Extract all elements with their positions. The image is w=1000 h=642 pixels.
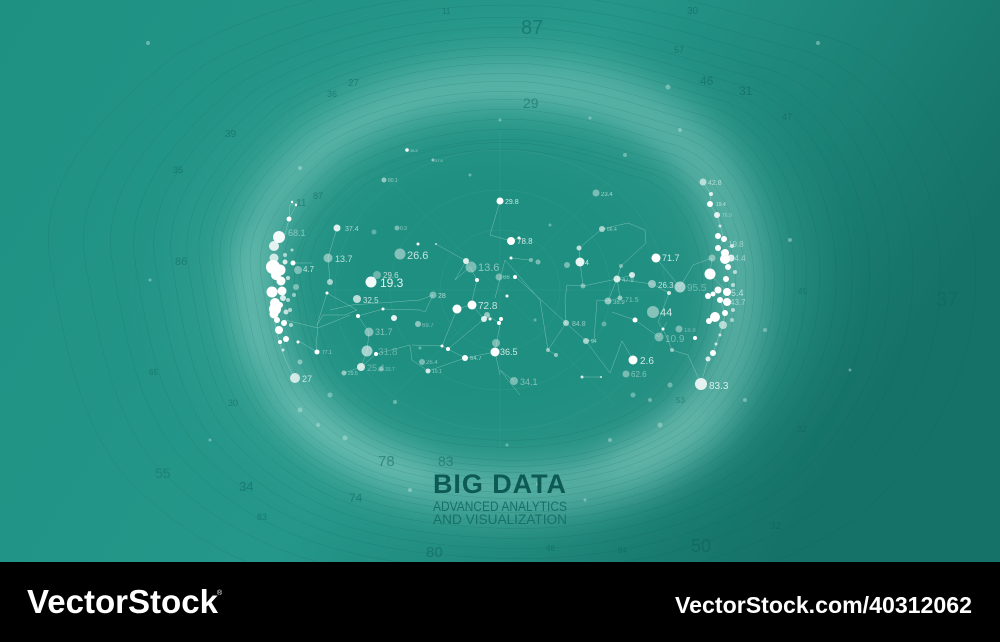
- background numbers: 36: [327, 89, 337, 99]
- footer logo: VectorStock: [27, 583, 219, 620]
- data value labels: 62.6: [631, 370, 647, 379]
- background numbers: 11: [296, 198, 307, 209]
- background numbers: 78: [378, 453, 395, 470]
- data value labels: 31.8: [378, 347, 398, 358]
- data value labels: 94: [591, 339, 597, 345]
- data value labels: 31.7: [375, 327, 393, 337]
- data value labels: 95.5: [687, 283, 707, 294]
- background numbers: 55: [155, 465, 171, 481]
- background numbers: 30: [228, 398, 238, 408]
- right data cluster: [700, 178, 737, 362]
- data value labels: 33.7: [385, 367, 395, 373]
- background numbers: 74: [349, 491, 363, 505]
- data value labels: 84.8: [572, 321, 586, 328]
- data value labels: 19.8: [728, 240, 744, 249]
- data value labels: 38.5: [410, 148, 419, 153]
- data value labels: 19.4: [716, 202, 726, 208]
- background numbers: 87: [521, 17, 543, 39]
- data value labels: 68.1: [288, 228, 306, 238]
- subtitle: advanced analytics and visualization: ADVANCED ANALYTICS: [433, 499, 567, 514]
- background numbers: 37: [936, 289, 958, 311]
- background numbers: 80: [426, 544, 443, 561]
- left and centre data nodes: [290, 148, 540, 385]
- data value labels: 4: [585, 260, 589, 267]
- background numbers: 11: [442, 7, 451, 16]
- data value labels: 19.3: [380, 276, 404, 290]
- data value labels: 69.7: [422, 323, 434, 329]
- data value labels: 25.4: [367, 363, 385, 373]
- glowing ring: [175, 35, 815, 535]
- background numbers: 32: [770, 521, 782, 532]
- right data nodes: [546, 190, 707, 390]
- data value labels: 4.7: [303, 265, 315, 274]
- title: big data: BIG DATA: [433, 469, 566, 499]
- data value labels: 13.7: [335, 254, 353, 264]
- background numbers: 83: [438, 453, 454, 469]
- data value labels: 18.8: [684, 328, 696, 334]
- polar grid in the centre: [330, 130, 670, 450]
- background numbers: 35: [173, 165, 183, 175]
- data value labels: 29.6: [383, 271, 399, 280]
- footer image id: VectorStock.com/40312062: [675, 592, 972, 618]
- background numbers: 87: [313, 191, 323, 201]
- data value labels: 36.5: [500, 347, 518, 357]
- data value labels: 26.3: [658, 281, 674, 290]
- subtitle: advanced analytics and visualization: AND VISUALIZATION: [433, 512, 567, 527]
- background numbers: 83: [257, 512, 267, 522]
- background numbers: 32: [797, 424, 807, 434]
- background numbers: 29: [523, 95, 539, 111]
- data value labels: 42.8: [708, 180, 722, 187]
- data value labels: 38.9: [613, 300, 625, 306]
- background numbers: 86: [175, 256, 187, 268]
- data value labels: 26.6: [407, 250, 428, 262]
- data value labels: 64.7: [470, 356, 482, 362]
- subtitle: advanced analytics and visualization: [433, 499, 567, 527]
- data value labels: 32.5: [363, 296, 379, 305]
- background numbers: 39: [225, 129, 237, 140]
- data value labels: [288, 148, 746, 392]
- background numbers: 65: [149, 368, 158, 377]
- data value labels: 77.1: [322, 350, 332, 356]
- data value labels: 0.3: [400, 226, 407, 232]
- left data cluster: [266, 201, 302, 364]
- scattered dust particles: [146, 41, 852, 502]
- data value labels: 29.8: [505, 199, 519, 206]
- data value labels: 24.4: [730, 254, 746, 263]
- background numbers: 31: [739, 84, 753, 98]
- data value labels: 71.5: [625, 297, 639, 304]
- data value labels: 28: [438, 293, 446, 300]
- data value labels: 5.4: [731, 288, 744, 298]
- data value labels: 76.9: [722, 213, 732, 219]
- data value labels: 47.9: [622, 278, 634, 284]
- background numbers: 53: [676, 396, 685, 405]
- data value labels: 29.5: [348, 371, 358, 377]
- registered mark: ®: [217, 589, 223, 597]
- background numbers: 34: [239, 479, 253, 494]
- data value labels: 10.9: [665, 334, 685, 345]
- data value labels: 71.7: [662, 253, 680, 263]
- data value labels: 27: [302, 374, 312, 384]
- data value labels: 80.1: [388, 178, 398, 184]
- data value labels: 34.1: [520, 377, 538, 387]
- background numbers: 45: [798, 287, 807, 296]
- data value labels: 10.1: [432, 369, 442, 375]
- data value labels: 78.8: [517, 237, 533, 246]
- background numbers: 57: [674, 45, 684, 55]
- data value labels: 44: [660, 307, 672, 319]
- background numbers: 47: [782, 112, 792, 122]
- data value labels: 83.3: [709, 381, 729, 392]
- background numbers: 46: [700, 74, 714, 88]
- data value labels: 37.6: [435, 158, 444, 163]
- data value labels: 23.4: [601, 192, 613, 198]
- footer bar: [0, 562, 1000, 642]
- background numbers: 27: [348, 78, 360, 89]
- data value labels: 66: [503, 275, 510, 281]
- background numbers: [149, 6, 958, 561]
- network links: [272, 182, 727, 395]
- data value labels: 13.6: [478, 262, 499, 274]
- background numbers: 84: [618, 546, 627, 555]
- data value labels: 43.7: [730, 298, 746, 307]
- data value labels: 66.4: [607, 227, 617, 233]
- data value labels: 2.6: [640, 356, 654, 367]
- data value labels: 72.8: [478, 301, 498, 312]
- data value labels: 26.4: [426, 360, 438, 366]
- data value labels: 37.4: [345, 226, 359, 233]
- background numbers: 50: [691, 536, 711, 556]
- background numbers: 30: [687, 6, 699, 17]
- background numbers: 46: [546, 544, 555, 553]
